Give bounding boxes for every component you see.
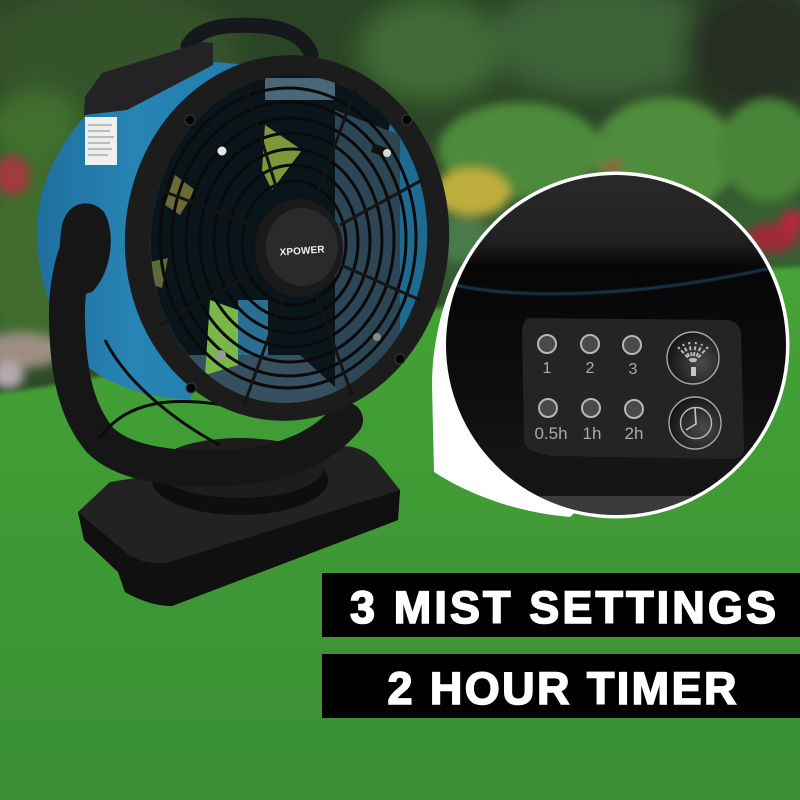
lower housing edge	[498, 468, 734, 498]
top carry handle	[188, 25, 311, 54]
timer labels: 0.5h	[534, 424, 568, 443]
fan interior	[150, 75, 428, 403]
banner: 2 hour timer: 2 HOUR TIMER	[388, 663, 736, 714]
fan base	[78, 438, 400, 606]
icon: timer button	[669, 397, 721, 449]
timer labels: 1h	[583, 424, 601, 443]
hub with logo: XPOWER	[279, 244, 326, 259]
blue rim line	[450, 266, 780, 294]
lawn	[0, 266, 800, 800]
callout border	[442, 172, 790, 518]
fan yoke arm	[67, 228, 345, 469]
mist level labels	[543, 360, 638, 378]
control box	[84, 42, 213, 115]
mist level labels: 2	[586, 360, 595, 377]
specification label	[85, 117, 117, 165]
timer labels	[534, 424, 643, 443]
callout: control panel close-up	[432, 170, 790, 520]
icon: mist button	[667, 332, 719, 384]
control panel plate	[522, 318, 744, 459]
timer indicators	[539, 399, 643, 418]
timer labels: 2h	[625, 424, 643, 443]
mist level labels: 1	[543, 360, 552, 377]
mist level labels: 3	[629, 361, 638, 378]
mist level indicators	[538, 335, 641, 354]
banner: 2 hour timer	[322, 654, 800, 718]
front guard ring	[110, 42, 464, 434]
product: misting fan	[37, 25, 464, 606]
banner: 3 mist settings: 3 MIST SETTINGS	[350, 582, 776, 633]
wire guard	[160, 88, 422, 405]
power cord	[100, 340, 240, 445]
callout tail	[432, 262, 620, 517]
yoke pivot	[59, 203, 111, 300]
blue fan body	[37, 62, 310, 400]
ring screws	[185, 115, 412, 393]
close-up photo	[440, 170, 790, 520]
hub with logo	[255, 199, 343, 297]
mist nozzles	[207, 143, 391, 360]
